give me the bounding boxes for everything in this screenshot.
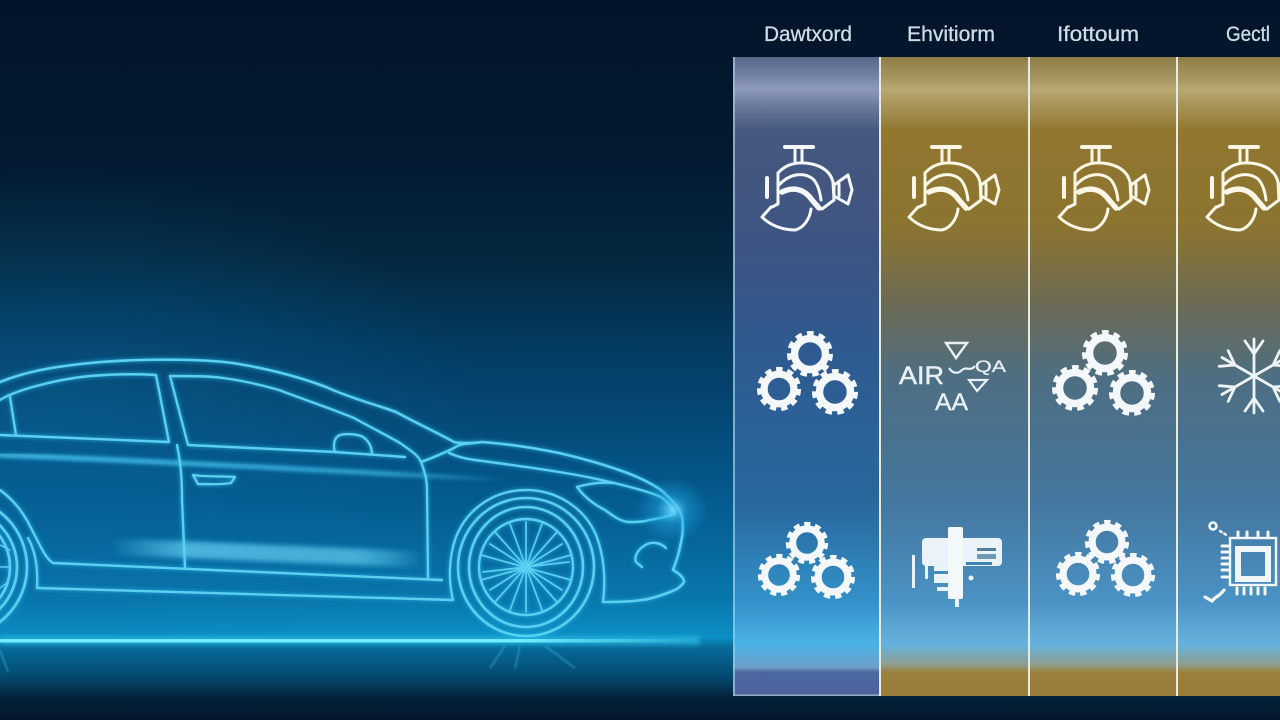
- column: Dawtxord: [733, 57, 879, 696]
- icon: gears, column 1 upper: [760, 334, 855, 412]
- car line drawing: [0, 360, 684, 636]
- icon: gears, column 3 upper: [1055, 333, 1152, 413]
- front wheel arch: [28, 490, 604, 602]
- icon: air conditioning mark: [899, 343, 1007, 416]
- icon: snowflake: [1217, 339, 1280, 413]
- body light streaks: [0, 455, 507, 568]
- icon: transmission unit: [912, 527, 1002, 607]
- icon: gears, column 1 lower: [761, 525, 852, 596]
- column: Gectl: [1177, 57, 1280, 696]
- icon: engine, column 3: [1059, 147, 1149, 230]
- heading: Dawtxord: Dawtxord: [764, 23, 852, 46]
- heading: Gectl: Gectl: [1226, 23, 1270, 46]
- headlight: [577, 483, 675, 522]
- left ambient glow: [0, 170, 480, 670]
- heading: Ehvitiorm: Ehvitiorm: [907, 23, 995, 46]
- icon: air conditioning mark: QA: [975, 357, 1007, 376]
- hood creases: [421, 442, 482, 462]
- icon: engine, column 4: [1207, 147, 1280, 230]
- door handle: [193, 475, 235, 484]
- headlight glow: [636, 478, 708, 542]
- column: Ehvitiorm: [879, 57, 1029, 696]
- ground light line: [0, 636, 700, 672]
- door mirror: [334, 434, 372, 454]
- icon: microchip: [1205, 522, 1276, 601]
- fog lamp: [635, 543, 666, 567]
- panel: comparison table: [733, 23, 1280, 696]
- rear wheel: [0, 498, 27, 636]
- car body outline: [0, 360, 684, 602]
- rear arch and lower sill: [0, 490, 442, 580]
- heading: Ifottoum: Ifottoum: [1057, 23, 1139, 46]
- windows and door: [0, 374, 169, 442]
- icon: engine, column 2: [909, 147, 999, 230]
- column dividers: [879, 57, 1178, 696]
- icon: engine, column 1: [762, 147, 852, 230]
- front wheel: [458, 498, 594, 636]
- column: Ifottoum: [1029, 57, 1177, 696]
- icon: gears, column 3 lower: [1059, 523, 1152, 594]
- icon: air conditioning mark: AIR: [899, 362, 944, 390]
- icon: air conditioning mark: AA: [935, 389, 968, 416]
